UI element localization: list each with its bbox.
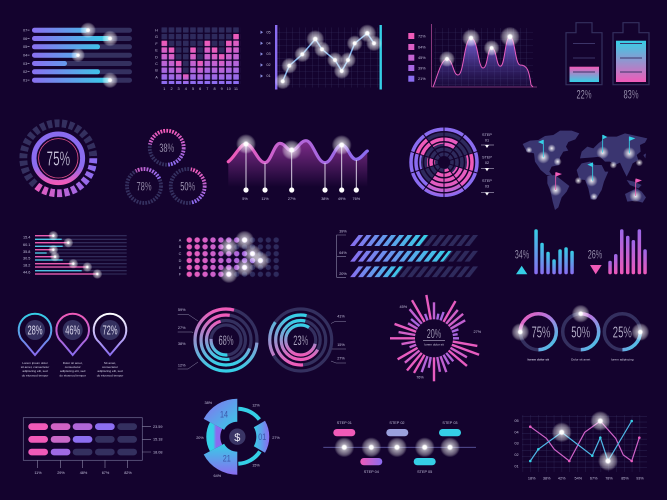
panel: heatmap column chart: 8: [213, 87, 216, 91]
panel: area chart with legend: 21%: [418, 77, 426, 81]
pin captions: consectetur: [102, 365, 118, 369]
panel: radial segmented chart: 02: [485, 161, 489, 165]
panel: heatmap column chart: 1: [163, 87, 165, 91]
panel: striped progress bars: 39%: [339, 230, 347, 234]
panel: location pins: [19, 314, 126, 377]
panel: area chart with legend: 45%: [418, 56, 426, 60]
panel: three small tick donuts: [127, 131, 205, 203]
panel: double line chart: 02: [514, 453, 519, 457]
panel: segmented dollar donut: 01: [258, 432, 266, 442]
panel: wave chart with pins: 11%: [261, 197, 269, 201]
panel: double line chart: 67%: [590, 477, 598, 481]
map landmasses: [523, 131, 647, 210]
panel: double line chart: 54%: [574, 477, 583, 481]
panel: double line chart: 05: [514, 419, 519, 423]
panel: heatmap column chart: 9: [221, 87, 223, 91]
panel: line chart with glowing points: [260, 24, 382, 89]
panel: line chart with glowing points: 01: [266, 74, 271, 78]
panel: horizontal progress bars: [23, 22, 132, 88]
panel: sunburst chart: 20%: [427, 326, 441, 341]
panel: heatmap column chart: 11: [234, 87, 238, 91]
panel: sunburst chart: lorem dolor sit: [424, 342, 444, 346]
panel: pill table: 23.59: [153, 425, 163, 429]
panel: segmented dollar donut: 27%: [272, 436, 280, 440]
panel: double line chart: 04: [514, 430, 519, 434]
panel: segmented dollar donut: 12%: [252, 403, 260, 407]
panel: concentric donut 23%: 41%: [337, 314, 345, 318]
pin 72%: 72%: [102, 323, 118, 338]
panel: dot matrix: F: [179, 273, 182, 277]
panel: horizontal progress bars: 01: [23, 78, 27, 82]
pin captions: do eiusmod tempor: [59, 373, 86, 377]
panel: blue column chart with 34%: [515, 229, 574, 274]
pin captions: sit amet, consectetur: [21, 365, 49, 369]
panel: thin paired line bars: 35.8: [23, 250, 30, 254]
panel: wave chart with pins: 49%: [338, 197, 346, 201]
panel: double line chart: 85%: [621, 477, 629, 481]
panel: three small tick donuts: 50%: [180, 179, 195, 193]
panel: heatmap column chart: H: [155, 28, 158, 32]
panel: three percentage gauges: Dolor sit amet: [571, 358, 590, 362]
pin captions: adipiscing elit, sed: [97, 369, 123, 373]
panel: wave chart with pins: 38%: [321, 197, 329, 201]
pin 28%: 28%: [28, 323, 43, 338]
panel: area chart with legend: 39%: [418, 66, 426, 70]
panel: concentric donut 23%: 23%: [293, 332, 308, 348]
panel: sunburst chart: 76%: [416, 376, 424, 380]
panel: pill table: 82%: [124, 471, 132, 475]
pin 46%: 46%: [65, 323, 80, 338]
panel: segmented dollar donut: [196, 399, 280, 478]
map flags: [543, 135, 636, 196]
panel: dot matrix: A: [179, 238, 182, 242]
panel: radial segmented chart: 01: [485, 138, 489, 142]
panel: three percentage gauges: 25%: [613, 324, 632, 342]
panel: heatmap column chart: 10: [227, 87, 231, 91]
panel: double line chart: 38%: [543, 477, 551, 481]
panel: large 75% donut: 75%: [47, 148, 70, 170]
panel: dot matrix: C: [179, 252, 182, 256]
panel: pill table: 15.18: [153, 438, 163, 442]
pin captions: consectetur: [65, 365, 81, 369]
panel: heatmap column chart: G: [155, 35, 158, 39]
panel: heatmap column chart: B: [155, 69, 158, 73]
panel: thin paired line bars: 18.2: [23, 264, 30, 268]
panel: double line chart: 78%: [605, 477, 613, 481]
panel: concentric donut 68%: 38%: [178, 342, 186, 346]
pin captions: Dolor sit amet,: [63, 361, 83, 365]
panel: heatmap column chart: E: [155, 49, 158, 53]
panel: thin paired line bars: 44.6: [23, 270, 30, 274]
panel: heatmap column chart: 3: [178, 87, 180, 91]
panel: three percentage gauges: 75%: [532, 324, 550, 342]
panel: three percentage gauges: lorem adipiscing: [611, 358, 634, 362]
panel: striped progress bars: 20%: [339, 272, 347, 276]
panel: concentric donut 23%: [270, 309, 346, 371]
panel: concentric donut 68%: [178, 308, 257, 371]
panel: three small tick donuts: 78%: [136, 179, 152, 193]
panel: dot matrix: B: [179, 245, 182, 249]
panel: segmented dollar donut: 21: [223, 454, 231, 464]
pin captions: do eiusmod tempor: [97, 373, 123, 377]
panel: segmented dollar donut: 14: [220, 410, 228, 420]
panel: horizontal progress bars: 06: [23, 37, 27, 41]
panel: horizontal progress bars: 07: [23, 28, 27, 32]
panel: double line chart: 18%: [528, 477, 536, 481]
panel: concentric donut 68%: 12%: [178, 364, 186, 368]
panel: concentric donut 23%: 27%: [337, 356, 345, 360]
panel: heatmap column chart: A: [155, 76, 158, 80]
panel: heatmap column chart: 7: [206, 87, 208, 91]
panel: heatmap column chart: 6: [199, 87, 201, 91]
panel: horizontal progress bars: 04: [23, 54, 27, 58]
panel: radial segmented chart: STEP: [482, 133, 492, 137]
panel: heatmap column chart: 4: [185, 87, 187, 91]
panel: concentric donut 68%: 27%: [178, 326, 186, 330]
panel: sunburst chart: [390, 295, 482, 381]
panel: pink column chart with 26%: 26%: [588, 247, 602, 261]
panel: sunburst chart: 45%: [399, 305, 408, 309]
panel: pill table: 48%: [80, 471, 88, 475]
panel: step timeline: [323, 421, 476, 474]
panel: heatmap column chart: 5: [192, 87, 194, 91]
panel: three percentage gauges: lorem dolor sit: [528, 358, 549, 362]
panel: pill table: 29%: [57, 471, 65, 475]
panel: thin paired line bars: 60.1: [23, 243, 30, 247]
pin captions: do eiusmod tempor: [22, 373, 48, 377]
panel: batteries: 83%: [624, 90, 638, 102]
panel: segmented dollar donut: $: [234, 432, 240, 444]
panel: area chart with legend: 72%: [418, 34, 426, 38]
panel: double line chart: 01: [514, 465, 519, 469]
panel: three percentage gauges: 50%: [571, 324, 590, 342]
panel: heatmap column chart: F: [155, 42, 158, 46]
panel: radial segmented chart: 03: [485, 184, 489, 188]
panel: step timeline: STEP 01: [337, 421, 352, 425]
panel: double line chart: 03: [514, 442, 519, 446]
panel: blue column chart with 34%: 34%: [515, 247, 529, 261]
panel: striped progress bars: 64%: [339, 251, 347, 255]
panel: dot matrix: [179, 230, 280, 283]
panel: radial segmented chart: STEP: [482, 156, 492, 160]
panel: step timeline: STEP 05: [417, 470, 432, 474]
panel: thin paired line bars: [23, 231, 127, 279]
panel: batteries: 22%: [576, 90, 592, 102]
panel: batteries: [566, 23, 649, 102]
panel: concentric donut 68%: 68%: [218, 332, 234, 348]
panel: pill table: 11%: [34, 471, 42, 475]
panel: concentric donut 23%: 15%: [337, 343, 345, 347]
panel: double line chart: 42%: [558, 477, 566, 481]
panel: radial segmented chart: STEP: [482, 179, 492, 183]
panel: thin paired line bars: 30.5: [23, 257, 30, 261]
panel: dot matrix: D: [179, 259, 182, 263]
panel: three small tick donuts: 38%: [159, 141, 174, 155]
panel: segmented dollar donut: 64%: [213, 474, 222, 478]
panel: segmented dollar donut: 15%: [252, 463, 260, 467]
panel: wave chart with pins: 5%: [242, 197, 248, 201]
panel: pill table: [23, 418, 163, 475]
panel: heatmap column chart: 2: [170, 87, 173, 91]
panel: wave chart with pins: [228, 134, 367, 201]
panel: line chart with glowing points: 03: [266, 52, 271, 56]
panel: heatmap column chart: D: [155, 55, 158, 59]
panel: pill table: 67%: [102, 471, 110, 475]
panel: horizontal progress bars: 05: [23, 45, 27, 49]
panel: sunburst chart: 27%: [473, 330, 482, 334]
panel: area chart with legend: [408, 24, 537, 87]
panel: line chart with glowing points: 04: [266, 42, 271, 46]
panel: wave chart with pins: 76%: [352, 197, 361, 201]
panel: step timeline: STEP 04: [364, 470, 379, 474]
panel: dot matrix: E: [179, 266, 182, 270]
panel: segmented dollar donut: 38%: [204, 401, 213, 405]
pin captions: Sit amet,: [104, 361, 116, 365]
pin captions: Lorem ipsum dolor: [22, 361, 48, 365]
pin captions: [21, 361, 123, 377]
panel: area chart with legend: 64%: [418, 46, 426, 50]
panel: pink column chart with 26%: [588, 229, 647, 274]
panel: concentric donut 68%: 59%: [178, 308, 186, 312]
panel: world map with flags: [523, 131, 647, 210]
panel: radial segmented chart: [409, 126, 494, 198]
panel: line chart with glowing points: 05: [266, 30, 271, 34]
panel: heatmap column chart: C: [155, 62, 158, 66]
panel: segmented dollar donut: 20%: [196, 436, 204, 440]
panel: large 75% donut: [23, 123, 93, 193]
panel: horizontal progress bars: 03: [23, 62, 27, 66]
panel: step timeline: STEP 03: [442, 421, 458, 425]
pin captions: adipiscing elit, sed: [60, 369, 86, 373]
pin captions: adipiscing elit, sed: [22, 369, 48, 373]
map glow markers: [526, 144, 643, 202]
panel: three percentage gauges: [511, 305, 649, 362]
panel: double line chart: [514, 411, 647, 481]
panel: heatmap column chart: [155, 27, 240, 91]
panel: wave chart with pins: 27%: [288, 197, 296, 201]
panel: pill table: 18.08: [153, 450, 163, 454]
panel: thin paired line bars: 15.4: [23, 236, 30, 240]
panel: line chart with glowing points: 02: [266, 63, 271, 67]
panel: striped progress bars: [337, 230, 490, 277]
panel: horizontal progress bars: 02: [23, 70, 27, 74]
panel: double line chart: 93%: [636, 477, 644, 481]
panel: step timeline: STEP 02: [389, 421, 405, 425]
